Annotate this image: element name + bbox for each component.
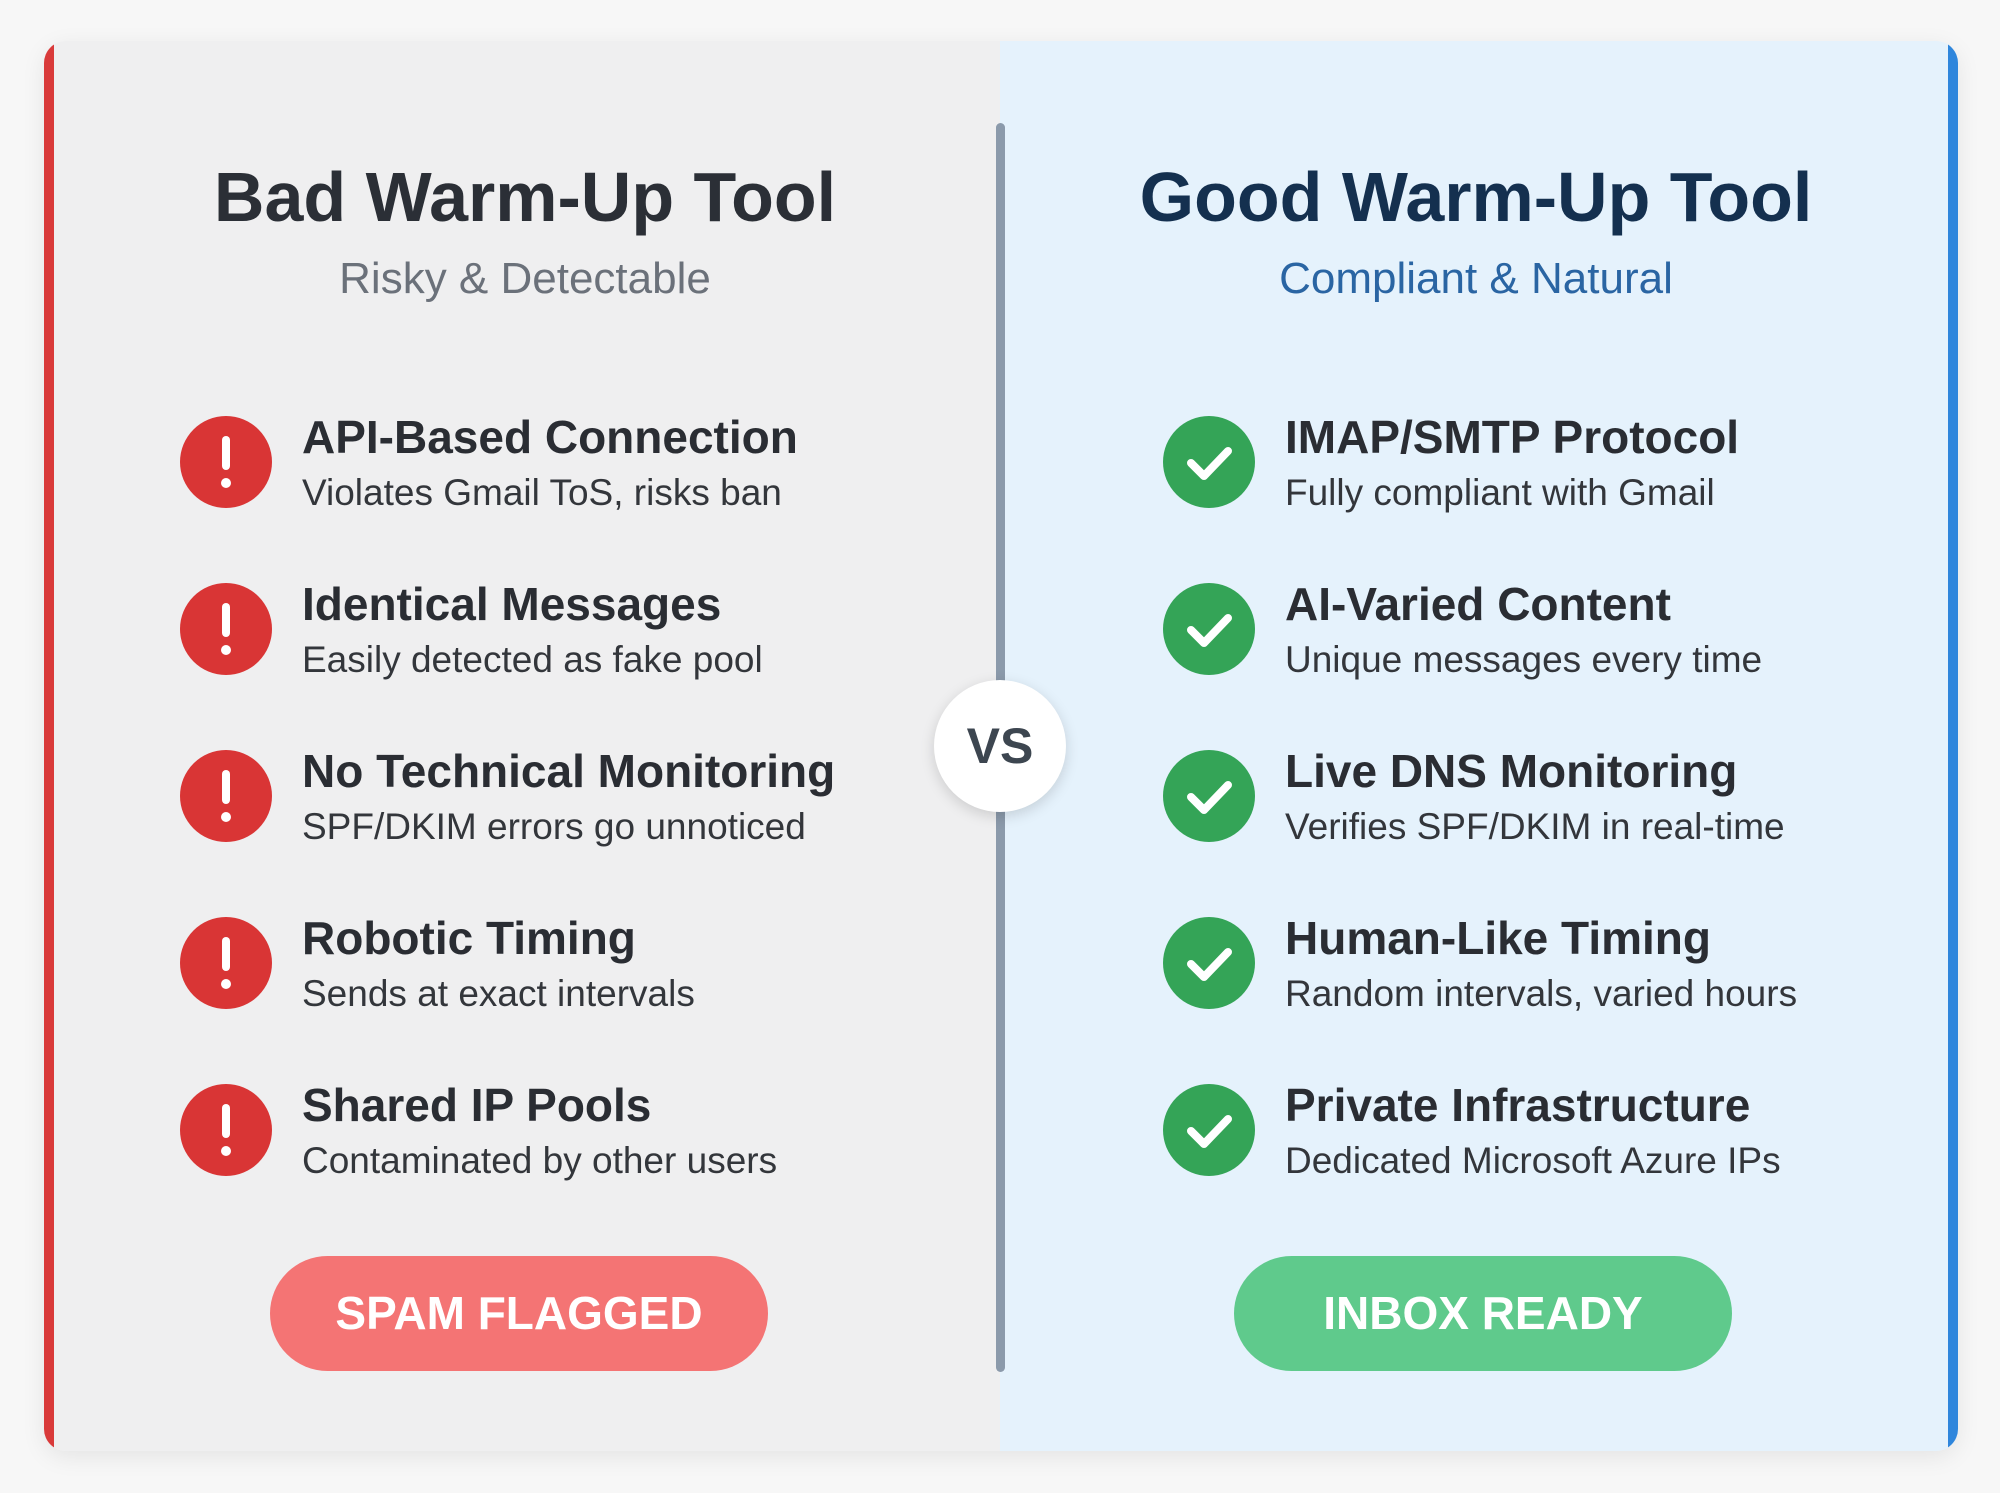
vs badge [934, 680, 1066, 812]
item: API: Violates Gmail ToS, risks ban [302, 472, 782, 513]
button: inbox ready [1234, 1256, 1732, 1371]
item: private infra [1163, 1079, 1781, 1181]
item: monitoring: SPF/DKIM errors go unnoticed [302, 806, 806, 847]
item: IMAP: IMAP/SMTP Protocol [1285, 411, 1739, 463]
item: identical: Easily detected as fake pool [302, 639, 763, 680]
item: DNS: Live DNS Monitoring [1285, 745, 1737, 797]
icon: alert [180, 917, 272, 1009]
icon: check [1163, 583, 1255, 675]
icon: check [1163, 917, 1255, 1009]
icon: check [1163, 750, 1255, 842]
item: timing: Robotic Timing [302, 912, 636, 964]
vs badge: VS [967, 718, 1033, 774]
button: spam flagged [270, 1256, 768, 1371]
item: monitoring: No Technical Monitoring [302, 745, 835, 797]
item: API: API-Based Connection [302, 411, 798, 463]
item: shared IP [180, 1079, 777, 1181]
item: API [180, 411, 798, 513]
item: AI: AI-Varied Content [1285, 578, 1671, 630]
icon: alert [180, 1084, 272, 1176]
title: good: Good Warm-Up Tool [1140, 158, 1812, 236]
icon: alert [180, 416, 272, 508]
icon: check [1163, 1084, 1255, 1176]
item: AI [1163, 578, 1762, 680]
item: identical [180, 578, 763, 680]
item: IMAP: Fully compliant with Gmail [1285, 472, 1715, 513]
item: private infra: Private Infrastructure [1285, 1079, 1750, 1131]
divider [996, 123, 1005, 1372]
item: AI: Unique messages every time [1285, 639, 1762, 680]
title: bad: Bad Warm-Up Tool [214, 158, 836, 236]
item: monitoring [180, 745, 835, 847]
button: spam flagged: SPAM FLAGGED [335, 1287, 703, 1339]
item: DNS [1163, 745, 1785, 847]
item: human timing: Human-Like Timing [1285, 912, 1711, 964]
item: timing [180, 912, 695, 1014]
item: shared IP: Contaminated by other users [302, 1140, 777, 1181]
item: DNS: Verifies SPF/DKIM in real-time [1285, 806, 1785, 847]
item: human timing [1163, 912, 1797, 1014]
icon: alert [180, 750, 272, 842]
item: private infra: Dedicated Microsoft Azure IPs [1285, 1140, 1781, 1181]
item: timing: Sends at exact intervals [302, 973, 695, 1014]
subtitle: good: Compliant & Natural [1279, 254, 1673, 303]
panel: bad tool [44, 41, 1000, 1451]
panel: good tool [1000, 41, 1958, 1451]
icon: check [1163, 416, 1255, 508]
item: identical: Identical Messages [302, 578, 721, 630]
item: human timing: Random intervals, varied hours [1285, 973, 1797, 1014]
item: shared IP: Shared IP Pools [302, 1079, 651, 1131]
button: inbox ready: INBOX READY [1323, 1287, 1643, 1339]
subtitle: bad: Risky & Detectable [339, 254, 711, 303]
icon: alert [180, 583, 272, 675]
item: IMAP [1163, 411, 1739, 513]
